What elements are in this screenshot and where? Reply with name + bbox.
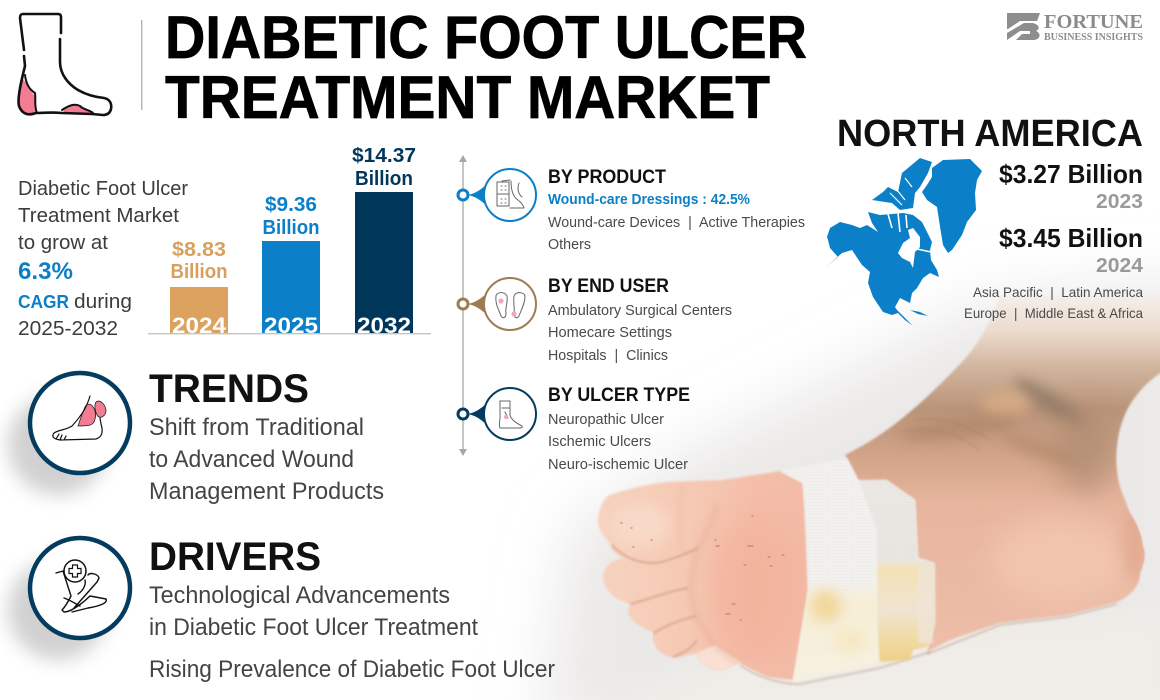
segment text: by end user: Homecare Settings [548, 324, 672, 341]
region values [999, 159, 1144, 277]
bar 2032 [352, 145, 416, 338]
segment text: by end user: BY END USER [548, 276, 669, 297]
region values: $3.27 Billion [999, 159, 1143, 189]
trends text [149, 414, 384, 505]
segment text: by ulcer type: Neuro-ischemic Ulcer [548, 456, 688, 473]
bar 2032: $14.37 [352, 145, 416, 167]
segment text: by product [548, 167, 805, 253]
text block: CAGR summary: during [74, 291, 132, 313]
other regions: Asia Pacific | Latin America [973, 284, 1143, 300]
region values: 2023 [1096, 191, 1143, 213]
segment icon: by ulcer type [458, 388, 536, 440]
segment text: by product: Others [548, 236, 591, 253]
drivers text: Technological Advancements [149, 582, 450, 609]
segment text: by ulcer type: Neuropathic Ulcer [548, 411, 664, 428]
bar 2024: $8.83 [172, 239, 226, 261]
icon: drivers circle [8, 538, 130, 660]
region values: $3.45 Billion [999, 223, 1143, 253]
title [165, 4, 807, 131]
photo: bandaged diabetic foot [540, 280, 1160, 700]
text block: CAGR summary: Treatment Market [18, 205, 179, 227]
segment text: by product: BY PRODUCT [548, 167, 666, 188]
title: DIABETIC FOOT ULCER [165, 4, 807, 71]
drivers text: Rising Prevalence of Diabetic Foot Ulcer [149, 656, 555, 683]
segment icon: by product [458, 169, 536, 221]
segment icon: by end user [458, 278, 536, 330]
drivers text: in Diabetic Foot Ulcer Treatment [149, 614, 478, 641]
timeline axis [459, 155, 467, 456]
segment text: by product: Wound-care Dressings : 42.5% [548, 192, 750, 208]
logo: Fortune Business Insights: FORTUNE [1044, 11, 1143, 33]
drivers text [149, 582, 555, 683]
segment text: by product: Wound-care Devices | Active Therapies [548, 214, 805, 231]
text block: CAGR summary: CAGR [18, 292, 69, 312]
segment text: by end user [548, 276, 732, 364]
segment text: by ulcer type: Ischemic Ulcers [548, 433, 651, 450]
bar 2024: Billion [170, 261, 228, 283]
trends text: Shift from Traditional [149, 414, 364, 441]
bar 2025: 2025 [264, 313, 318, 338]
icon: trends circle [8, 373, 130, 495]
toes and sole [598, 471, 808, 680]
bar chart: market size [148, 145, 431, 338]
bar 2032: Billion [355, 168, 413, 190]
segment text: by ulcer type: BY ULCER TYPE [548, 385, 690, 406]
trends text: to Advanced Wound [149, 446, 354, 473]
map: North America [826, 158, 982, 326]
trends heading: TRENDS [149, 367, 309, 411]
text block: CAGR summary: 2025-2032 [18, 318, 118, 340]
segment text: by ulcer type [548, 385, 690, 473]
text block: CAGR summary: Diabetic Foot Ulcer [18, 178, 188, 200]
icon: foot with ulcer [19, 14, 111, 115]
bar 2025: $9.36 [265, 194, 317, 216]
title: TREATMENT MARKET [165, 64, 770, 131]
divider [141, 20, 142, 110]
dressing [780, 458, 935, 682]
region values: 2024 [1096, 255, 1144, 277]
logo: Fortune Business Insights: BUSINESS INSIGHTS [1044, 32, 1143, 43]
text block: CAGR summary [18, 178, 188, 340]
other regions [964, 284, 1143, 321]
segment text: by end user: Hospitals | Clinics [548, 347, 668, 364]
bar 2025: Billion [262, 217, 320, 239]
bar 2024: 2024 [172, 313, 227, 338]
segment text: by end user: Ambulatory Surgical Centers [548, 302, 732, 319]
trends text: Management Products [149, 478, 384, 505]
region heading: NORTH AMERICA [837, 113, 1143, 155]
drivers heading: DRIVERS [149, 535, 321, 579]
bar 2025 [262, 194, 320, 338]
logo: Fortune Business Insights [1007, 11, 1143, 43]
text block: CAGR summary: to grow at [18, 232, 108, 254]
bar 2024 [170, 239, 228, 338]
other regions: Europe | Middle East & Africa [964, 305, 1143, 321]
bar 2032: 2032 [357, 313, 411, 338]
text block: CAGR summary: 6.3% [18, 258, 73, 285]
